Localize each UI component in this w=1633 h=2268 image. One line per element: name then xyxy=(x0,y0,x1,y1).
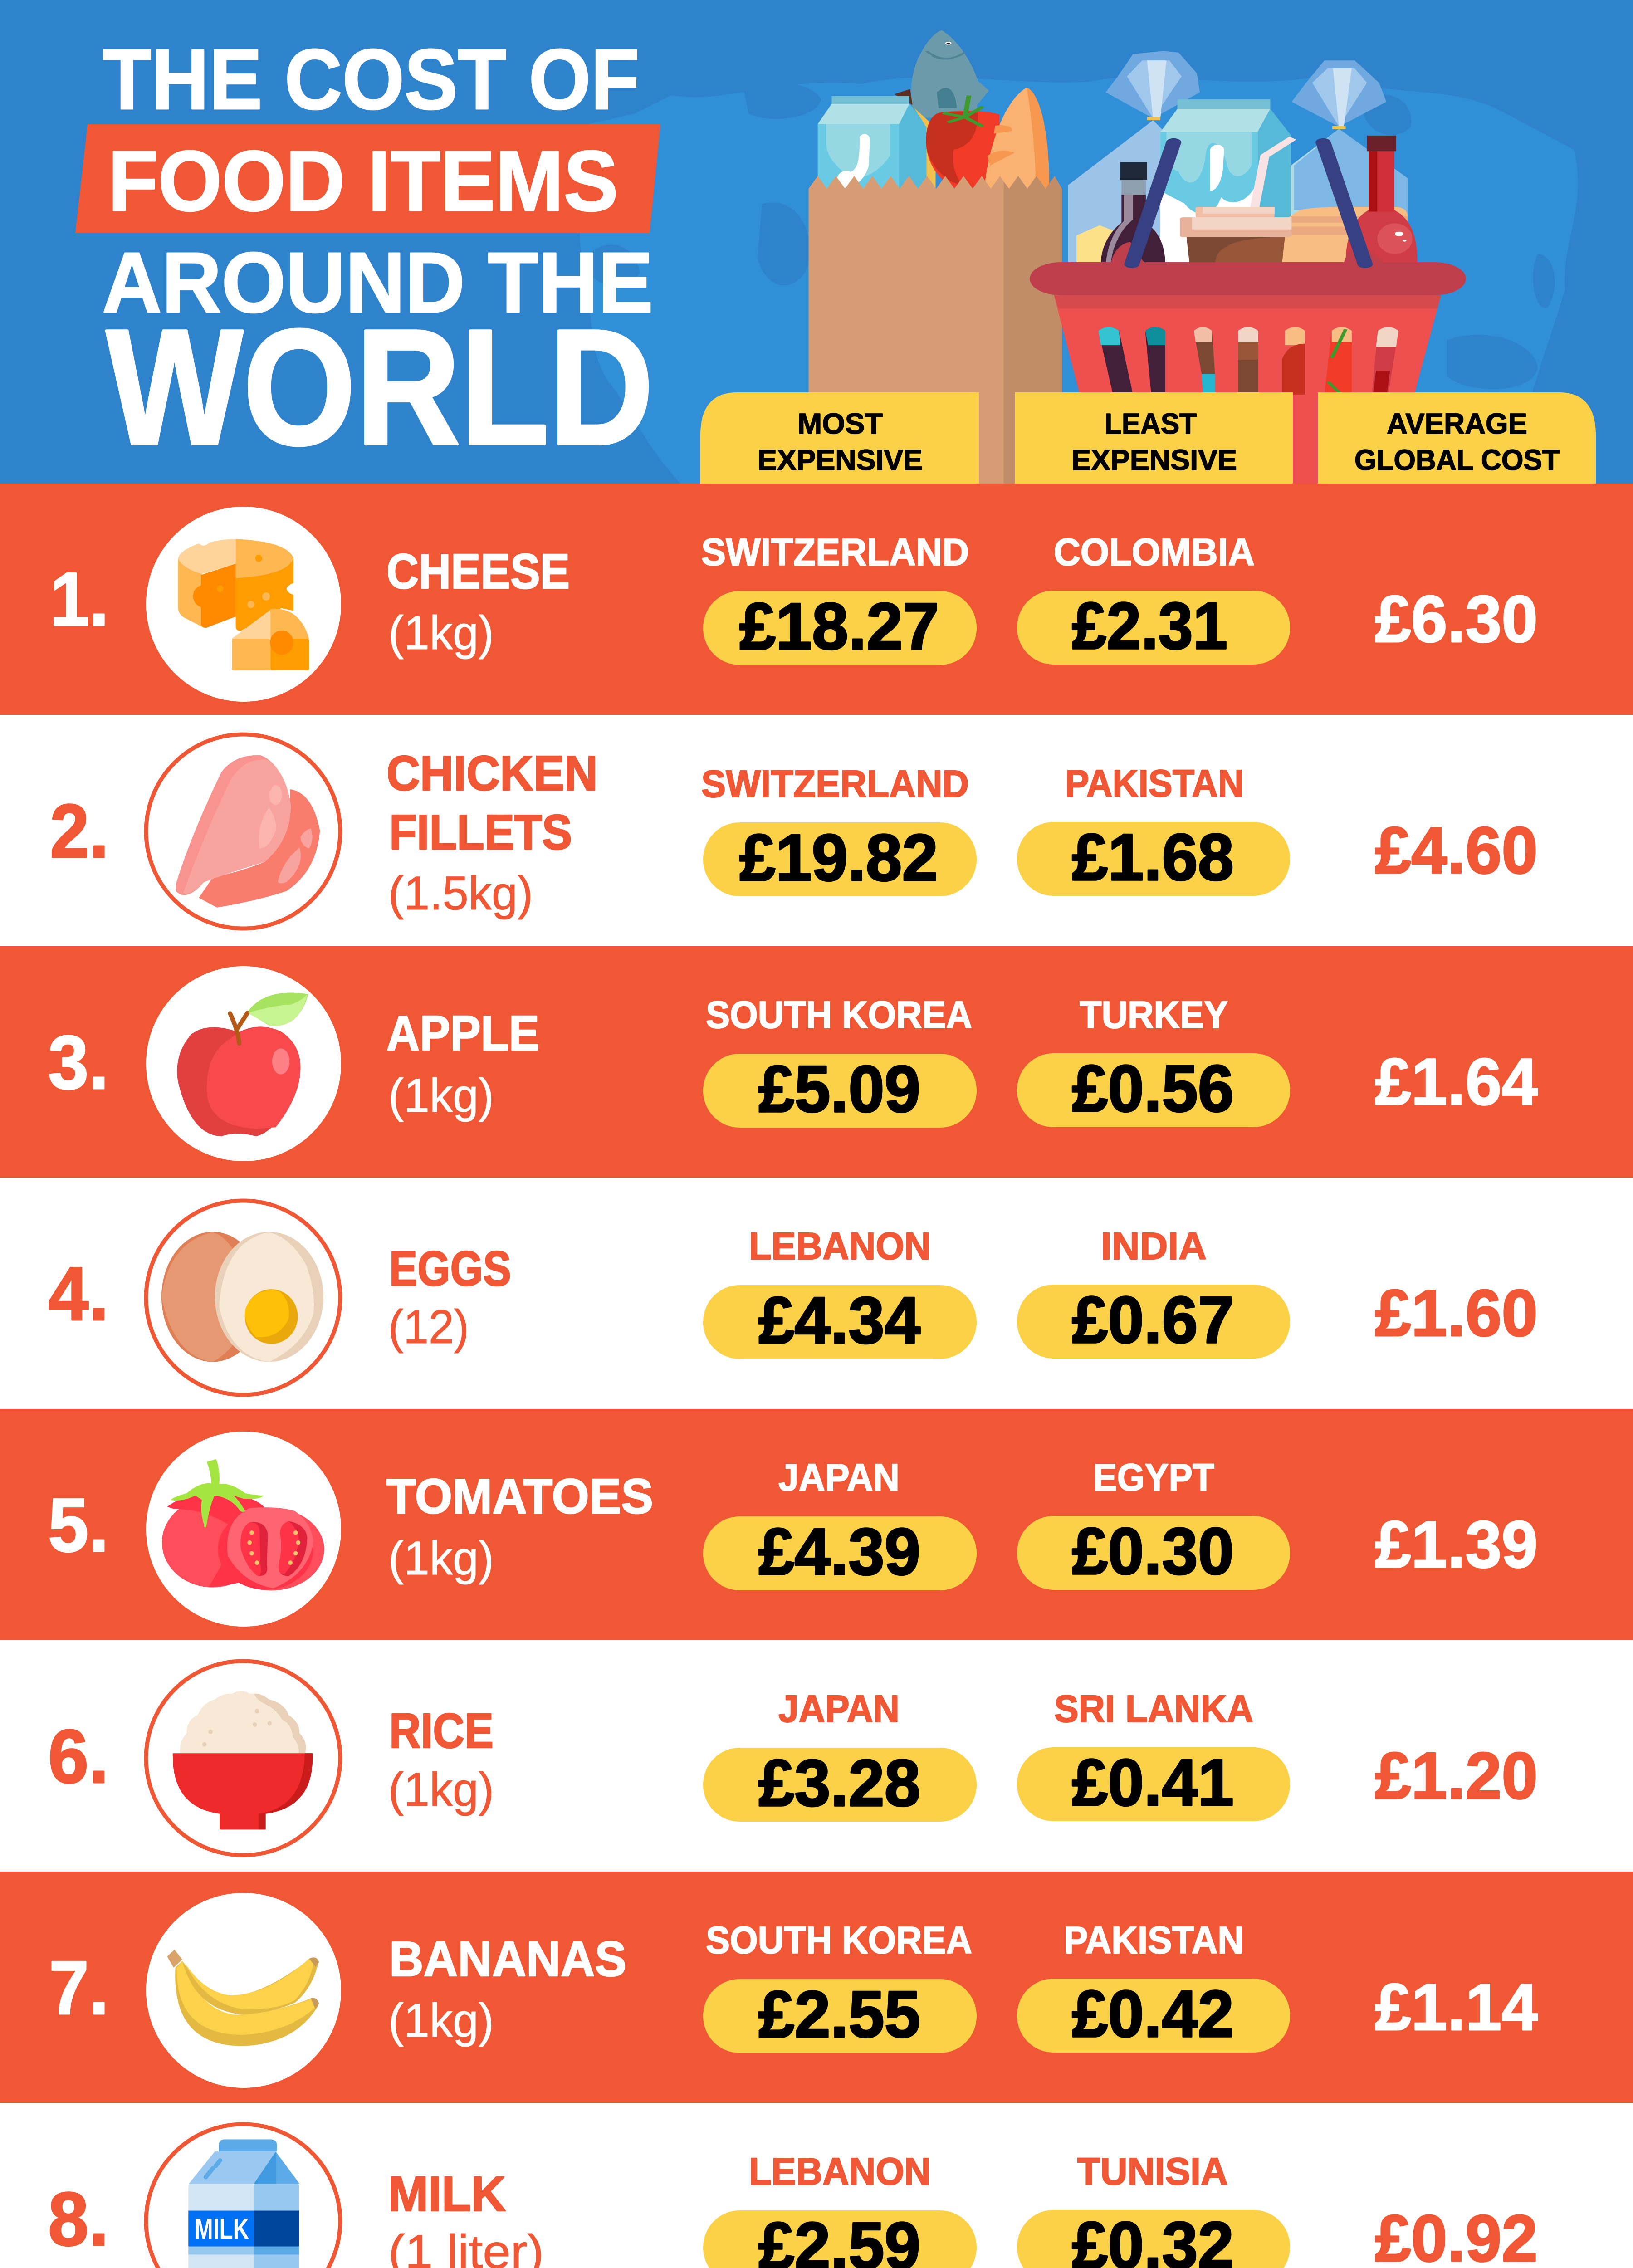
most expensive price: £19.82 xyxy=(739,821,938,894)
column header: average global cost xyxy=(1318,392,1596,484)
icon: bananas xyxy=(167,1950,319,2046)
least expensive country: TUNISIA xyxy=(1077,2150,1228,2193)
amount: (1.5kg) xyxy=(388,867,533,920)
wine bottle xyxy=(1101,162,1165,264)
icon disc xyxy=(146,1432,341,1627)
most expensive price xyxy=(703,1515,977,1590)
average cost: £1.20 xyxy=(1375,1739,1538,1813)
cheese block xyxy=(1076,225,1118,264)
least expensive price xyxy=(1017,1977,1290,2053)
average cost: £1.39 xyxy=(1375,1507,1538,1581)
icon ring xyxy=(146,1661,340,1855)
icon disc xyxy=(146,507,341,702)
title: WORLD xyxy=(106,295,654,479)
milk carton in bag xyxy=(818,96,926,191)
name: CHICKEN xyxy=(386,746,598,801)
icon disc xyxy=(146,966,341,1161)
name: EGGS xyxy=(389,1241,511,1296)
least expensive country: INDIA xyxy=(1101,1225,1207,1267)
amount: (1kg) xyxy=(388,1763,494,1816)
icon ring xyxy=(146,2124,340,2268)
name: CHEESE xyxy=(386,544,570,599)
basket slots xyxy=(1098,327,1398,395)
basket body xyxy=(1054,295,1441,485)
name: FILLETS xyxy=(389,805,572,860)
average cost: £6.30 xyxy=(1375,582,1538,656)
rank: 1. xyxy=(50,557,109,642)
most expensive country: SWITZERLAND xyxy=(701,531,969,573)
least expensive price xyxy=(1017,1514,1290,1590)
butter and orange packet xyxy=(1282,207,1408,264)
icon ring xyxy=(146,734,340,929)
most expensive price xyxy=(703,1283,977,1359)
column header: most expensive: EXPENSIVE xyxy=(758,444,923,476)
least expensive country: SRI LANKA xyxy=(1054,1687,1253,1730)
least expensive price: £0.42 xyxy=(1072,1977,1234,2051)
most expensive price xyxy=(703,2209,977,2268)
row 1: cheese xyxy=(0,484,1633,715)
most expensive country: LEBANON xyxy=(749,2150,931,2193)
least expensive country: PAKISTAN xyxy=(1065,762,1244,805)
least expensive country: PAKISTAN xyxy=(1064,1919,1244,1961)
most expensive country: JAPAN xyxy=(778,1456,900,1499)
icon: eggs xyxy=(161,1232,323,1362)
icon: milk carton: MILK xyxy=(195,2212,249,2245)
name: TOMATOES xyxy=(386,1469,653,1524)
rank: 6. xyxy=(48,1714,109,1799)
name: APPLE xyxy=(386,1006,539,1061)
most expensive country: SOUTH KOREA xyxy=(706,993,972,1036)
row 3: apple xyxy=(0,946,1633,1178)
most expensive price xyxy=(703,1052,977,1128)
rank: 8. xyxy=(48,2176,109,2262)
least expensive price: £2.31 xyxy=(1072,589,1227,663)
icon: rice bowl xyxy=(173,1691,313,1829)
least expensive price xyxy=(1017,1051,1290,1127)
column header: least expensive: LEAST xyxy=(1105,407,1197,440)
most expensive price: £5.09 xyxy=(758,1052,920,1126)
basket rim xyxy=(1030,262,1466,295)
least expensive price: £1.68 xyxy=(1072,820,1234,894)
icon ring xyxy=(146,1201,340,1395)
average cost: £1.64 xyxy=(1375,1045,1538,1119)
icon: apple xyxy=(177,993,308,1136)
coffee cup xyxy=(1180,207,1291,264)
least expensive price xyxy=(1017,1745,1290,1821)
column header: most expensive: MOST xyxy=(797,407,883,440)
least expensive country: COLOMBIA xyxy=(1054,531,1255,573)
least expensive price xyxy=(1017,2208,1290,2268)
name: MILK xyxy=(388,2166,506,2222)
rank: 2. xyxy=(50,788,109,874)
row 7: bananas xyxy=(0,1872,1633,2103)
most expensive price: £2.55 xyxy=(758,1977,920,2051)
most expensive country: SWITZERLAND xyxy=(701,763,969,805)
most expensive price: £4.34 xyxy=(758,1283,920,1357)
least expensive country: EGYPT xyxy=(1093,1456,1214,1499)
rank: 5. xyxy=(48,1482,109,1568)
name xyxy=(386,746,598,860)
header panel xyxy=(0,0,1633,485)
amount: (1kg) xyxy=(388,1994,494,2047)
most expensive price: £3.28 xyxy=(758,1746,920,1820)
name: BANANAS xyxy=(389,1931,626,1987)
icon: tomatoes xyxy=(162,1459,324,1590)
name: RICE xyxy=(389,1703,494,1759)
tomato in bag xyxy=(914,95,999,191)
most expensive price xyxy=(703,1977,977,2053)
icon: chicken xyxy=(176,755,320,908)
most expensive country: SOUTH KOREA xyxy=(706,1919,972,1961)
average cost: £4.60 xyxy=(1375,813,1538,887)
most expensive country: LEBANON xyxy=(749,1225,931,1267)
least expensive price: £0.41 xyxy=(1072,1745,1234,1819)
milk carton in basket xyxy=(1160,99,1291,264)
amount: (1kg) xyxy=(388,606,494,660)
most expensive price: £18.27 xyxy=(739,589,939,663)
amount: (1kg) xyxy=(388,1069,494,1122)
least expensive price xyxy=(1017,820,1290,896)
paper bag xyxy=(809,176,1062,485)
row 2: chicken fillets xyxy=(50,734,1538,929)
straw xyxy=(1255,138,1293,208)
row 4: eggs xyxy=(48,1201,1538,1395)
least expensive price: £0.56 xyxy=(1072,1051,1234,1125)
illustration: grocery bag and basket xyxy=(809,30,1466,485)
column header: least expensive: EXPENSIVE xyxy=(1071,444,1237,476)
icon: milk carton xyxy=(188,2139,299,2268)
amount: (12) xyxy=(388,1300,469,1354)
column header: average global cost: AVERAGE xyxy=(1387,407,1527,440)
amount: (1kg) xyxy=(388,1532,494,1585)
least expensive country: TURKEY xyxy=(1080,993,1228,1036)
icon: cheese xyxy=(178,539,309,670)
column header: most expensive xyxy=(700,392,979,484)
average cost: £1.60 xyxy=(1375,1276,1538,1350)
least expensive price xyxy=(1017,1283,1290,1359)
least expensive price: £0.67 xyxy=(1072,1283,1234,1357)
baguette xyxy=(984,88,1049,191)
column header: least expensive xyxy=(1015,392,1293,484)
title banner xyxy=(75,124,660,233)
title xyxy=(75,32,660,479)
least expensive price xyxy=(1017,589,1290,665)
sauce bottle xyxy=(1346,136,1418,264)
row 8: milk xyxy=(48,2124,1538,2268)
title: THE COST OF xyxy=(103,32,640,127)
most expensive price xyxy=(703,1746,977,1822)
least expensive price: £0.30 xyxy=(1072,1514,1234,1588)
column header: average global cost: GLOBAL COST xyxy=(1354,444,1560,476)
row 5: tomatoes xyxy=(0,1409,1633,1640)
average cost: £1.14 xyxy=(1375,1970,1538,2044)
icon disc xyxy=(146,1893,341,2088)
most expensive country: JAPAN xyxy=(778,1687,900,1730)
rank: 3. xyxy=(48,1020,109,1105)
world map background xyxy=(576,77,1578,484)
basket handles xyxy=(1110,142,1384,264)
most expensive price: £4.39 xyxy=(758,1515,920,1589)
fish xyxy=(894,30,989,118)
rank: 7. xyxy=(49,1945,109,2030)
title: AROUND THE xyxy=(102,235,653,331)
rank: 4. xyxy=(48,1251,109,1336)
row 6: rice xyxy=(48,1661,1538,1855)
title: FOOD ITEMS xyxy=(108,133,618,229)
plastic bags xyxy=(1068,51,1408,264)
